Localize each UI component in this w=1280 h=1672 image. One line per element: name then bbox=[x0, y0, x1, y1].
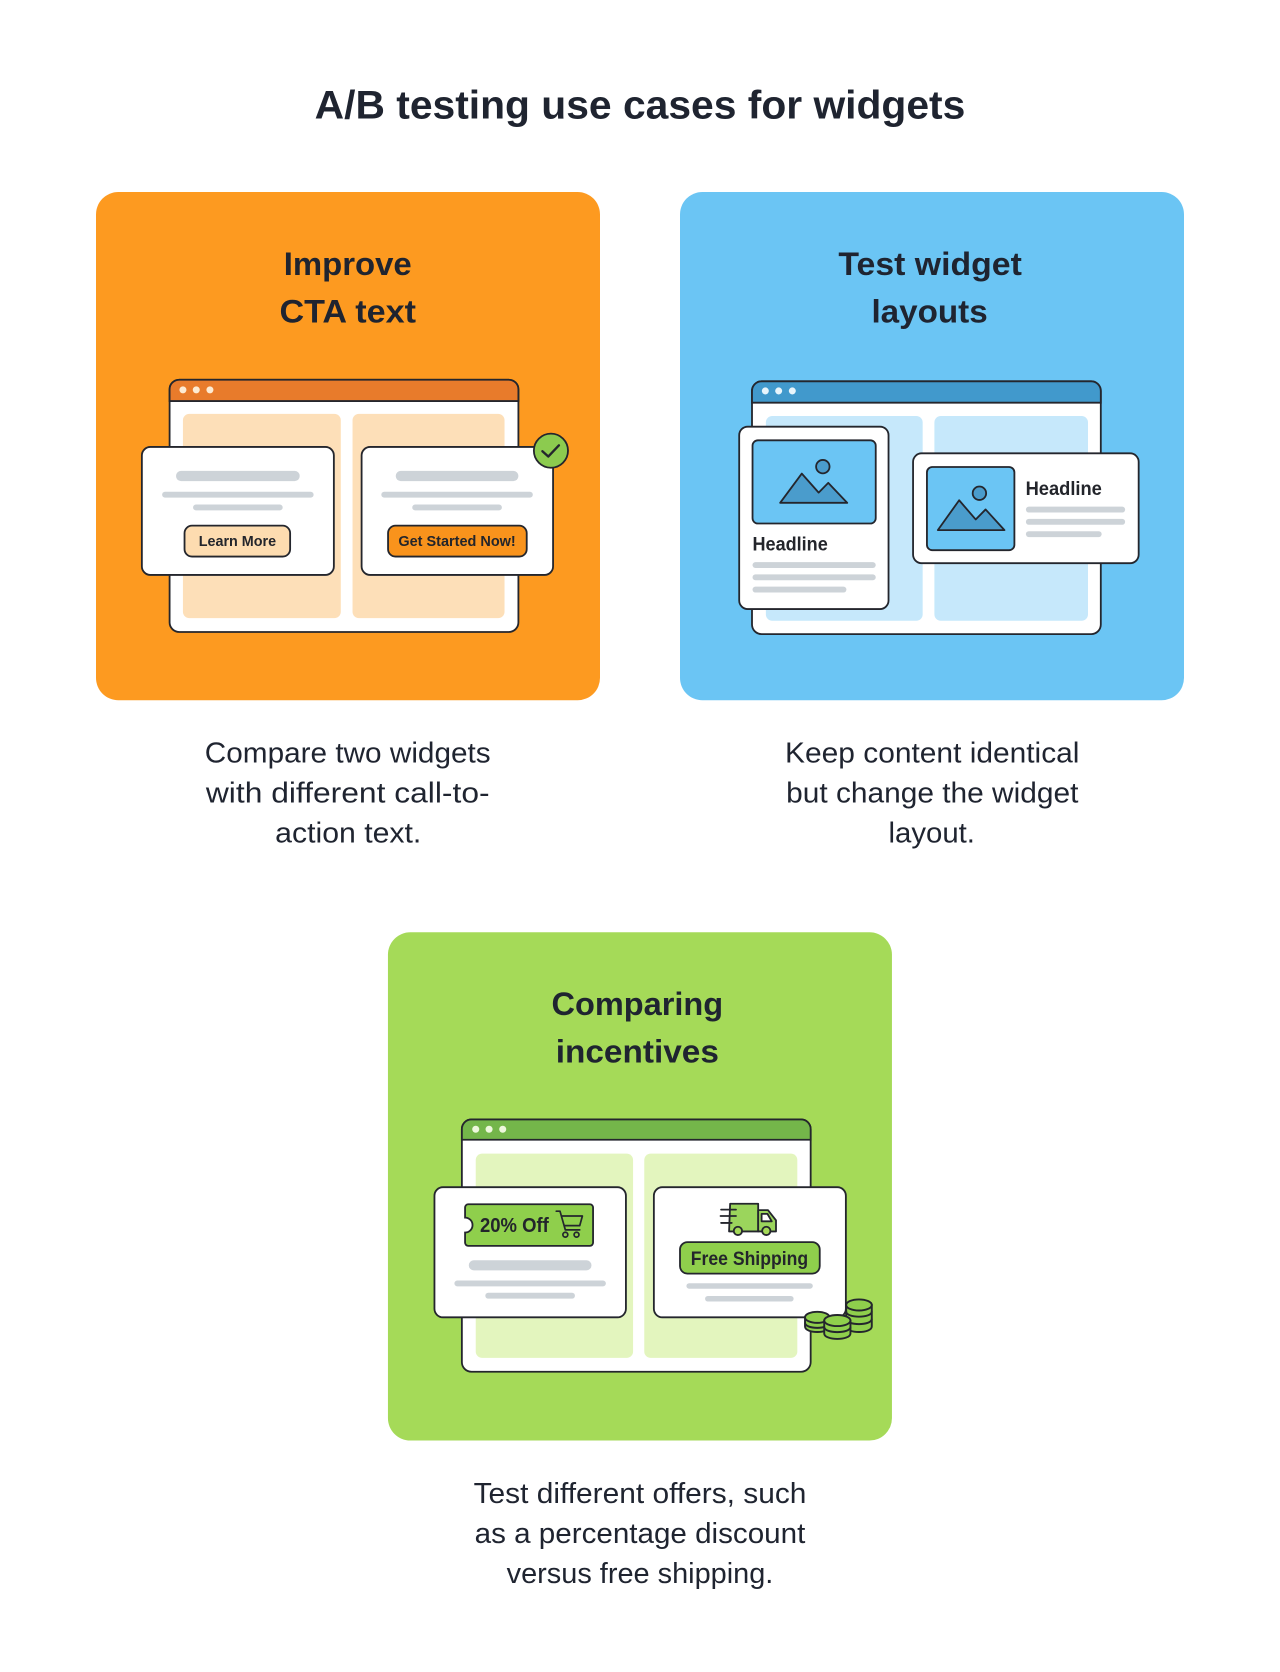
caption: improve CTA text bbox=[205, 737, 491, 849]
panel: test widget layouts bbox=[680, 192, 1184, 700]
caption: comparing incentives: as a percentage discount bbox=[475, 1517, 805, 1549]
caption: improve CTA text: action text. bbox=[275, 817, 421, 849]
free shipping button: Free Shipping bbox=[691, 1249, 808, 1270]
heading: comparing incentives bbox=[551, 986, 723, 1069]
coupon badge bbox=[465, 1204, 593, 1246]
heading: test widget layouts bbox=[838, 246, 1022, 330]
widget B: get started now: Get Started Now! bbox=[398, 534, 516, 550]
panel: comparing incentives bbox=[388, 932, 892, 1441]
widget: free shipping bbox=[654, 1187, 846, 1317]
caption: test widget layouts: but change the widget bbox=[786, 777, 1079, 809]
browser window bbox=[170, 380, 518, 632]
heading: improve CTA text: Improve bbox=[284, 246, 412, 282]
panel: improve CTA text bbox=[96, 192, 600, 700]
heading: comparing incentives: Comparing bbox=[551, 986, 723, 1022]
caption: improve CTA text: Compare two widgets bbox=[205, 737, 491, 769]
heading: comparing incentives: incentives bbox=[556, 1033, 719, 1069]
heading: improve CTA text: CTA text bbox=[279, 294, 416, 330]
widget: 20% off bbox=[434, 1187, 626, 1317]
widget B: get started now bbox=[362, 447, 553, 575]
widget: vertical layout: Headline bbox=[753, 533, 828, 555]
widget: vertical layout bbox=[739, 427, 889, 609]
widget A: learn more bbox=[142, 447, 334, 575]
caption: test widget layouts bbox=[785, 737, 1079, 849]
caption: comparing incentives: Test different offers, such bbox=[474, 1477, 806, 1509]
widget: horizontal layout: Headline bbox=[1026, 478, 1102, 500]
caption: comparing incentives: versus free shipping. bbox=[507, 1557, 773, 1589]
browser window bbox=[462, 1119, 811, 1372]
heading: test widget layouts: Test widget bbox=[838, 246, 1022, 282]
icon: coin stacks bbox=[805, 1299, 872, 1339]
caption: comparing incentives bbox=[474, 1477, 806, 1589]
caption: test widget layouts: layout. bbox=[889, 817, 975, 849]
widget: horizontal layout bbox=[913, 453, 1139, 563]
icon: shopping cart bbox=[556, 1211, 582, 1237]
caption: improve CTA text: with different call-to- bbox=[205, 777, 490, 809]
heading: test widget layouts: layouts bbox=[871, 294, 988, 330]
icon: green check badge bbox=[534, 434, 568, 468]
widget A: learn more: Learn More bbox=[199, 534, 276, 550]
free shipping button bbox=[680, 1242, 820, 1274]
heading: improve CTA text bbox=[279, 246, 416, 330]
browser window bbox=[752, 381, 1101, 634]
icon: delivery truck bbox=[721, 1204, 776, 1235]
coupon badge: 20% Off bbox=[480, 1215, 549, 1237]
title: A/B testing use cases for widgets bbox=[315, 83, 965, 127]
caption: test widget layouts: Keep content identical bbox=[785, 737, 1079, 769]
